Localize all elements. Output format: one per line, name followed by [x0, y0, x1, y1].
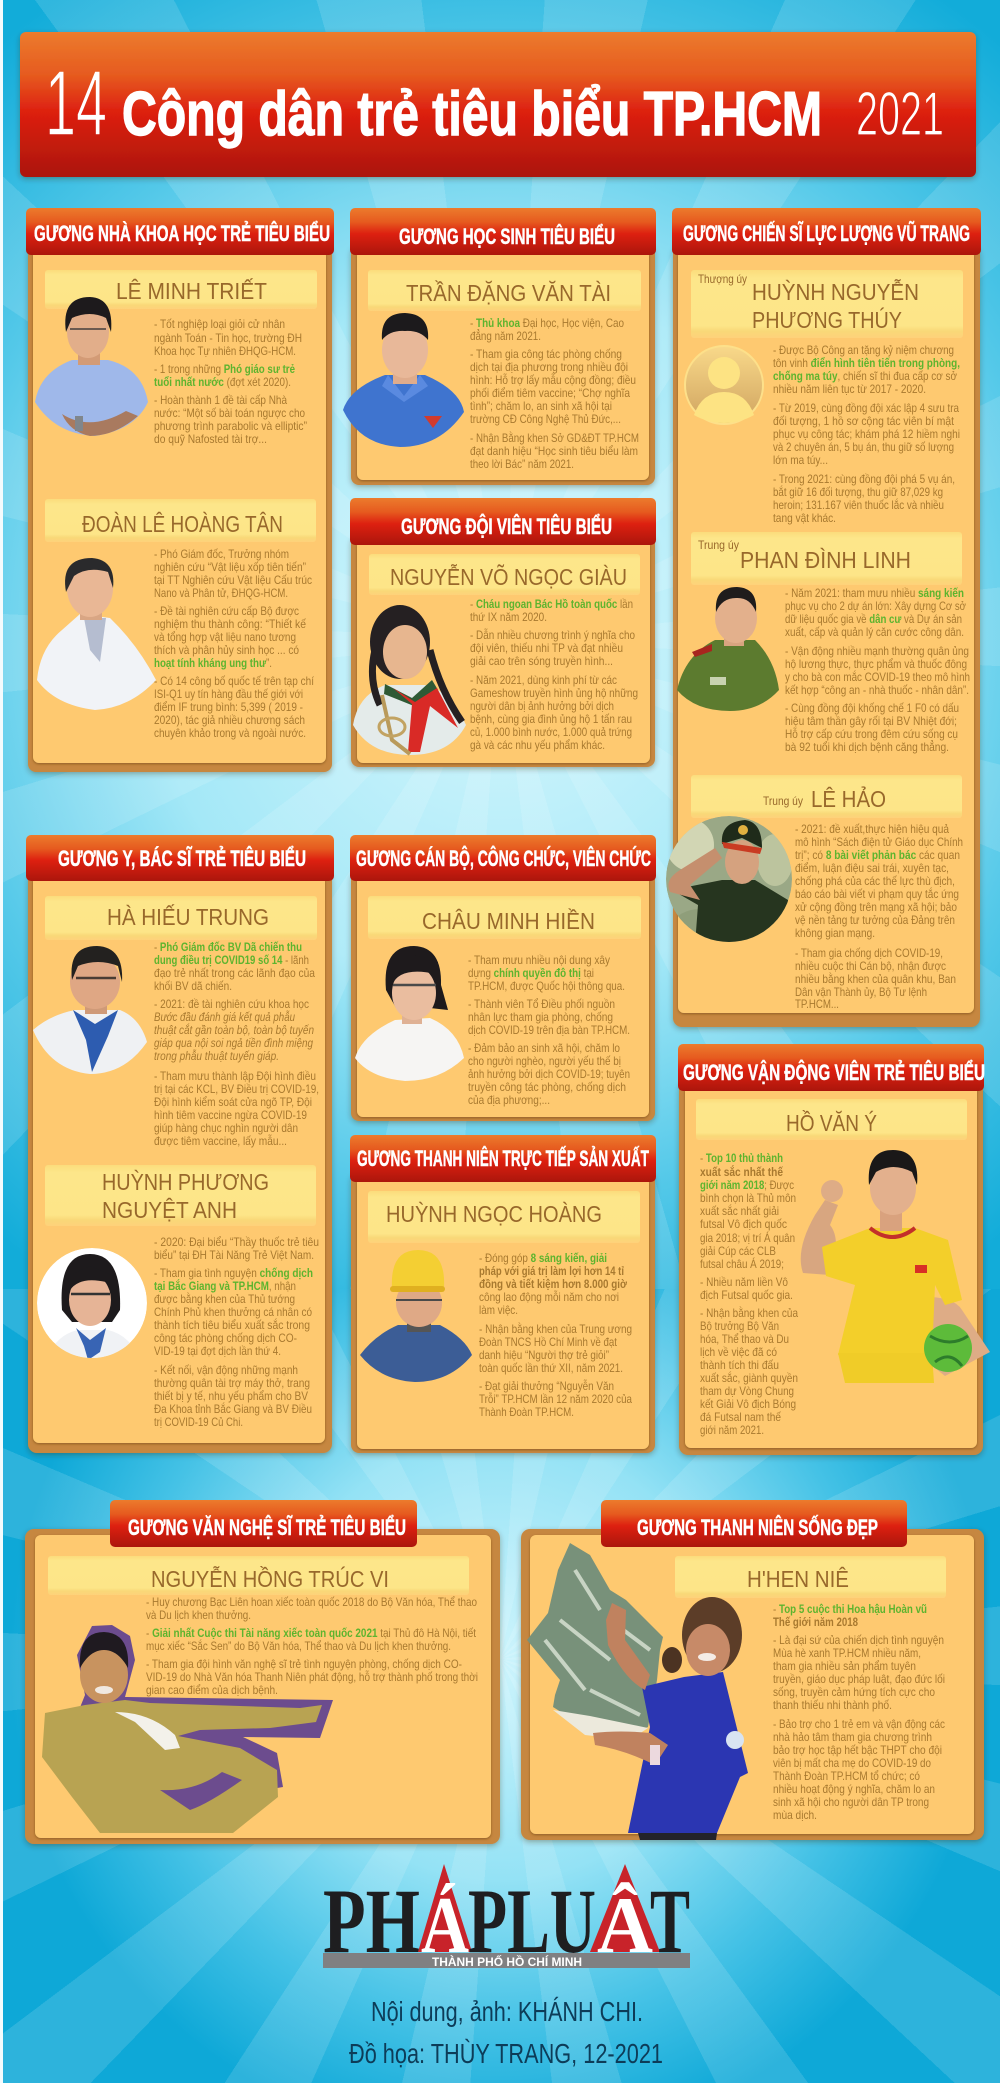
bio: Lê Hảo: nhiều cuộc thi Cán bộ, nhận được — [795, 959, 946, 973]
bio: Lê Hảo: vệ nền tảng tư tưởng của Đảng trên — [795, 913, 955, 927]
bio: Huỳnh Phương Nguyệt Anh: Chính Phủ khen thưởng cá nhân có — [154, 1305, 312, 1319]
portrait: Trần Đặng Văn Tài — [343, 313, 464, 447]
bio: Hồ Văn Ý: - Nhận bằng khen của — [700, 1305, 798, 1320]
bio: Nguyễn Võ Ngọc Giàu: bệnh, cùng gia đình ủng hộ 1 tấn rau — [470, 712, 632, 726]
bio: Phan Đình Linh: - Vận động nhiều mạnh thường quân ủng — [785, 644, 969, 658]
bio: Hồ Văn Ý: xuất sắc nhất thế — [700, 1164, 783, 1179]
bio: H'Hen Niê: Thành Đoàn TP.HCM tổ chức; có — [773, 1769, 920, 1783]
bio: Hồ Văn Ý: lịch về việc đã có — [700, 1345, 777, 1359]
bio: Nguyễn Hồng Trúc Vi: VID-19 do Nhà Văn hóa Thanh Niên phát động, hỗ trợ thành phố trong thời — [146, 1669, 478, 1684]
bio: Đoàn Lê Hoàng Tân — [154, 547, 315, 740]
bio: Châu Minh Hiền — [468, 953, 630, 1107]
name bar: Châu Minh Hiền — [368, 896, 641, 939]
bio: Hà Hiếu Trung: giúp hàng chục nghìn người dân — [154, 1121, 298, 1135]
bio: Lê Hảo: trị”; có 8 bài viết phản bác các quan — [795, 848, 960, 862]
bio: Đoàn Lê Hoàng Tân: - Đề tài nghiên cứu cấp Bộ được — [154, 604, 299, 618]
bio: Lê Hảo: Dân vận Thành ủy, Bộ Tư lệnh — [795, 985, 927, 999]
portrait: Hà Hiếu Trung — [33, 946, 147, 1074]
bio: Châu Minh Hiền: cho người nghèo, người yếu thế bị — [468, 1054, 621, 1068]
bio: Châu Minh Hiền: dịch COVID-19 trên địa bàn TP.HCM. — [468, 1023, 630, 1037]
panel: outstanding young pioneer — [350, 498, 656, 767]
bio: Hà Hiếu Trung: đạo trẻ nhất trong các lãnh đạo của — [154, 966, 315, 980]
panel: young scientists — [26, 208, 334, 772]
logo: Pháp Luật: T — [650, 1870, 690, 1972]
bio: Hồ Văn Ý: xuất sắc, giành quyền — [700, 1370, 798, 1385]
bio: Phan Đình Linh: bà 92 tuổi khi dịch bệnh căng thẳng. — [785, 739, 949, 754]
bio: Hồ Văn Ý: Bộ trưởng Bộ Văn — [700, 1319, 779, 1333]
portrait: H'Hen Niê with painting — [527, 1543, 748, 1840]
title year: 2021 — [856, 80, 944, 149]
bio: Lê Minh Triết: do quỹ Nafosted tài trợ... — [154, 432, 267, 446]
bio: Huỳnh Ngọc Hoàng: đồng và tiết kiệm hơn 8.000 giờ — [479, 1277, 627, 1291]
bio: Huỳnh Phương Nguyệt Anh: biểu” tại ĐH Tài Năng Trẻ Việt Nam. — [154, 1248, 314, 1262]
bio: H'Hen Niê: mùa dịch. — [773, 1808, 817, 1822]
name bar: H'Hen Niê: H'HEN NIÊ — [747, 1566, 849, 1592]
bio: Châu Minh Hiền: của địa phương;... — [468, 1093, 550, 1107]
bio: Lê Minh Triết: nước: “Một số bài toán ngược cho — [154, 406, 305, 420]
name bar: Huỳnh Nguyễn Phương Thúy: Thượng úy — [698, 272, 747, 286]
bio: Huỳnh Nguyễn Phương Thúy: - Được Bộ Công an tặng kỷ niệm chương — [773, 343, 954, 357]
title text: Công dân trẻ tiêu biểu TP.HCM — [122, 80, 822, 149]
bio: Hà Hiếu Trung: thuật cắt gần toàn bộ, toàn bộ tuyến — [154, 1022, 314, 1037]
bio: Huỳnh Ngọc Hoàng: công lao động mỗi năm cho nơi — [479, 1289, 619, 1304]
bio: Đoàn Lê Hoàng Tân: Nano và Phân tử, ĐHQG-HCM. — [154, 586, 288, 600]
bio: Châu Minh Hiền: ảnh hưởng bởi dịch COVID-19; tuyên — [468, 1067, 630, 1081]
bio: H'Hen Niê: - Top 5 cuộc thi Hoa hậu Hoàn vũ — [773, 1602, 927, 1616]
name bar: Lê Hảo: Trung úy — [763, 794, 803, 808]
bio: Lê Hảo: TP.HCM... — [795, 997, 839, 1011]
bio: Phan Đình Linh: hiệu tâm thần gây rối tại BV Nhiệt đới; — [785, 714, 957, 728]
bio: Nguyễn Hồng Trúc Vi: gian cao điểm của dịch bệnh. — [146, 1683, 278, 1697]
name bar: Huỳnh Nguyễn Phương Thúy: HUỲNH NGUYỄN — [752, 277, 919, 305]
name bar: Phan Đình Linh — [691, 532, 962, 585]
bio: Huỳnh Phương Nguyệt Anh: - Kết nối, vận động những mạnh — [154, 1363, 298, 1377]
bio: Trần Đặng Văn Tài: - Thủ khoa Đại học, Học viện, Cao — [470, 316, 624, 330]
bio: Trần Đặng Văn Tài — [470, 316, 639, 471]
bio: Hồ Văn Ý: kết Giải Vô địch Bóng — [700, 1397, 796, 1411]
name bar: Hà Hiếu Trung — [45, 896, 317, 940]
name bar: Đoàn Lê Hoàng Tân — [45, 499, 316, 542]
bio: Hồ Văn Ý: giới năm 2018; Được — [700, 1178, 794, 1192]
logo: Pháp Luật: PLU — [468, 1870, 596, 1972]
name bar: Lê Hảo — [691, 775, 962, 818]
bio: Huỳnh Nguyễn Phương Thúy: - Trong 2021: cùng đồng đội phá 5 vụ án, — [773, 472, 955, 486]
bio: Lê Minh Triết: - Tốt nghiệp loại giỏi cử nhân — [154, 317, 285, 331]
panel heading — [26, 835, 334, 881]
bio: Hồ Văn Ý: - Nhiều năm liền Vô — [700, 1275, 788, 1289]
bio: Phan Đình Linh: hộ lương thực, thực phẩm và thuốc đông — [785, 657, 967, 671]
bio: H'Hen Niê: Mùa hè xanh TP.HCM nhiều năm, — [773, 1646, 921, 1660]
bio: Huỳnh Nguyễn Phương Thúy: lớn ma túy... — [773, 453, 828, 467]
bio: Nguyễn Võ Ngọc Giàu: đội viên, thiếu nhi TP và đạt nhiều — [470, 641, 623, 655]
panel heading — [350, 498, 656, 545]
panel heading — [350, 208, 656, 255]
bio: Phan Đình Linh: - Năm 2021: tham mưu nhiều sáng kiến — [785, 586, 964, 600]
bio: Lê Minh Triết: - 1 trong những Phó giáo sư trẻ — [154, 362, 295, 376]
name bar: Đoàn Lê Hoàng Tân: ĐOÀN LÊ HOÀNG TÂN — [82, 511, 283, 537]
bio: Hà Hiếu Trung: dung điều trị COVID19 số 14 - lãnh — [154, 953, 309, 967]
bio: Hồ Văn Ý: futsal Vô địch quốc — [700, 1217, 787, 1231]
panel heading: GƯƠNG ĐỘI VIÊN TIÊU BIỂU — [401, 514, 612, 539]
portrait: Châu Minh Hiền — [355, 946, 464, 1081]
bio: Nguyễn Hồng Trúc Vi: - Huy chương Bạc Liên hoan xiếc toàn quốc 2018 do Bộ Văn hóa, Thể thao — [146, 1595, 477, 1609]
bio: Hồ Văn Ý: xuất sắc nhất giải — [700, 1203, 779, 1218]
name bar: Huỳnh Ngọc Hoàng — [368, 1191, 640, 1243]
portrait: Huỳnh Phương Nguyệt Anh — [37, 1248, 147, 1360]
bio: Huỳnh Ngọc Hoàng: Trỗi” TP.HCM lần 12 năm 2020 của — [479, 1391, 632, 1406]
bio: Nguyễn Hồng Trúc Vi: và Du lịch khen thưởng. — [146, 1608, 251, 1622]
bio: Hồ Văn Ý: bình chọn là Thủ môn — [700, 1191, 796, 1205]
bio: Đoàn Lê Hoàng Tân: hoạt tính kháng ung thư”. — [154, 656, 272, 670]
bio: Huỳnh Phương Nguyệt Anh: tại Bắc Giang và TP.HCM, nhận — [154, 1278, 296, 1293]
name bar: Hồ Văn Ý: HỒ VĂN Ý — [786, 1109, 877, 1136]
bio: Hồ Văn Ý: gia 2018; vị trí Á quân — [700, 1230, 795, 1245]
bio: H'Hen Niê: viên bị mất cha mẹ do COVID-19 do — [773, 1756, 931, 1770]
bio: Huỳnh Nguyễn Phương Thúy: heroin; 131.167 viên thuốc lắc và nhiều — [773, 497, 944, 512]
bio: Huỳnh Nguyễn Phương Thúy: tôn vinh điển hình tiên tiến trong phòng, — [773, 356, 960, 370]
name bar: Trần Đặng Văn Tài — [368, 270, 641, 311]
panel: armed forces — [666, 208, 981, 1027]
bio: Đoàn Lê Hoàng Tân: thích và phân hủy sinh học ... có — [154, 643, 299, 657]
panel heading: GƯƠNG VĂN NGHỆ SĨ TRẺ TIÊU BIỂU — [128, 1515, 406, 1540]
bio: Huỳnh Phương Nguyệt Anh: - Tham gia tình nguyện chống dịch — [154, 1266, 313, 1280]
bio: H'Hen Niê: truyền, giáo dục pháp luật, đạo đức lối — [773, 1672, 945, 1686]
name bar: Huỳnh Phương Nguyệt Anh: HUỲNH PHƯƠNG — [102, 1169, 269, 1195]
name bar: Lê Minh Triết: LÊ MINH TRIẾT — [116, 277, 267, 304]
panel heading — [350, 835, 656, 881]
bio: Đoàn Lê Hoàng Tân: - Phó Giám đốc, Trưởng nhóm — [154, 547, 289, 561]
panel heading: GƯƠNG CÁN BỘ, CÔNG CHỨC, VIÊN CHỨC — [356, 846, 651, 871]
bio: H'Hen Niê: nhà hảo tâm tham gia chương trình — [773, 1730, 932, 1744]
bio: Đoàn Lê Hoàng Tân: chuyên khảo trong và ngoài nước. — [154, 726, 306, 740]
name bar: Nguyễn Võ Ngọc Giàu: NGUYỄN VÕ NGỌC GIÀU — [390, 562, 627, 590]
title banner — [20, 32, 976, 177]
panel: beautiful living — [521, 1500, 984, 1840]
bio: Huỳnh Phương Nguyệt Anh: thường quân tài trợ máy thở, trang — [154, 1376, 310, 1390]
bio: Lê Minh Triết: Khoa học Tự nhiên ĐHQG-HCM. — [154, 344, 296, 358]
panel heading — [601, 1500, 907, 1547]
name bar: Huỳnh Phương Nguyệt Anh — [45, 1165, 316, 1226]
bio: Châu Minh Hiền: truyền công tác phòng, chống dịch — [468, 1080, 626, 1094]
bio: Huỳnh Nguyễn Phương Thúy: đối tượng, 1 hồ sơ cộng tác viên bí mật — [773, 414, 955, 428]
bio: Hồ Văn Ý: giải Cúp các CLB — [700, 1244, 776, 1258]
bio: Lê Hảo — [795, 822, 963, 1011]
bio: Hồ Văn Ý: futsal châu Á 2019; — [700, 1256, 784, 1271]
bio: Hà Hiếu Trung: trị tại các KCL, BV Điều trị COVID-19, — [154, 1082, 319, 1096]
bio: Lê Hảo: - Tham gia chống dịch COVID-19, — [795, 946, 943, 960]
icon: placeholder avatar — [685, 346, 763, 424]
bio: Hồ Văn Ý — [700, 1151, 798, 1437]
bio: Huỳnh Phương Nguyệt Anh: công tác phòng chống dịch CO- — [154, 1331, 297, 1345]
name bar: Trần Đặng Văn Tài: TRẦN ĐẶNG VĂN TÀI — [406, 279, 611, 306]
bio: Huỳnh Phương Nguyệt Anh: thành tích tiêu biểu xuất sắc trong — [154, 1317, 310, 1332]
logo: Pháp Luật: PH — [323, 1870, 420, 1972]
bio: Huỳnh Nguyễn Phương Thúy: bắt giữ 16 đối tượng, thu giữ 87,029 kg — [773, 484, 943, 499]
portrait: Huỳnh Ngọc Hoàng — [360, 1250, 472, 1382]
bio: Hồ Văn Ý: đá Futsal nam thế — [700, 1410, 781, 1424]
logo: Pháp Luật — [323, 1864, 690, 1972]
portrait: Lê Hảo — [666, 816, 793, 945]
bio: Trần Đặng Văn Tài: - Tham gia công tác phòng chống — [470, 347, 622, 361]
bio: Hồ Văn Ý: - Top 10 thủ thành — [700, 1151, 783, 1165]
panel heading: GƯƠNG HỌC SINH TIÊU BIỂU — [399, 224, 615, 249]
portrait: Nguyễn Võ Ngọc Giàu — [353, 605, 466, 755]
bio: Hà Hiếu Trung: hình tiêm vaccine ngừa COVID-19 — [154, 1108, 307, 1122]
bio: Trần Đặng Văn Tài: dịch tại địa phương trong nhiều đội — [470, 360, 628, 374]
bio: Lê Minh Triết: tuổi nhất nước (đợt xét 2020). — [154, 375, 291, 389]
bio: Lê Minh Triết: phương trình parabolic và elliptic” — [154, 419, 307, 433]
bio: Phan Đình Linh: xuất, cấp và quản lý căn cước công dân. — [785, 625, 964, 639]
bio: Nguyễn Võ Ngọc Giàu: Gameshow truyền hình ủng hộ những — [470, 686, 638, 700]
bio: Châu Minh Hiền: nhân lực tham gia phòng, chống — [468, 1010, 613, 1024]
bio: Đoàn Lê Hoàng Tân: nghiệm thu thành công: “Thiết kế — [154, 617, 306, 631]
name bar: Huỳnh Nguyễn Phương Thúy: PHƯƠNG THÚY — [752, 307, 902, 333]
bio: Phan Đình Linh: Hỗ trợ cấp cứu trong đêm cứu sống cụ — [785, 726, 958, 741]
bio: Lê Hảo: báo cáo bài viết vi phạm quy tắc ứng — [795, 886, 959, 901]
bio: Lê Hảo: xử cộng đồng trên mạng xã hội; bảo — [795, 900, 957, 914]
bio: Đoàn Lê Hoàng Tân: - Có 14 công bố quốc tế trên tạp chí — [154, 674, 315, 688]
logo: Pháp Luật: Á — [421, 1882, 469, 1970]
name bar: Phan Đình Linh: Trung úy — [698, 538, 739, 552]
name bar: H'Hen Niê — [675, 1556, 946, 1598]
bio: Trần Đặng Văn Tài: tình”; chăm lo, an sinh xã hội tại — [470, 399, 612, 413]
portrait: Hồ Văn Ý — [801, 1150, 990, 1383]
bio: Phan Đình Linh: - Cùng đồng đội khống chế 1 F0 có dấu — [785, 701, 959, 715]
bio: Trần Đặng Văn Tài: đạt danh hiệu “Học sinh tiêu biểu làm — [470, 444, 638, 458]
bio: H'Hen Niê: - Là đại sứ của chiến dịch tình nguyện — [773, 1633, 944, 1647]
bio: Huỳnh Phương Nguyệt Anh: Đa Khoa tỉnh Bắc Giang và BV Điều — [154, 1401, 312, 1416]
bio: Hà Hiếu Trung: Đội hình kiểm soát cửa ngõ TP, Đội — [154, 1095, 312, 1109]
name bar: Nguyễn Hồng Trúc Vi — [48, 1556, 469, 1595]
bio: Huỳnh Ngọc Hoàng: danh hiệu “Người thợ trẻ giỏi” — [479, 1348, 609, 1362]
bio: Trần Đặng Văn Tài: theo lời Bác” năm 2021. — [470, 457, 574, 471]
credits: Nội dung, ảnh: KHÁNH CHI. — [371, 1996, 643, 2027]
bio: Huỳnh Ngọc Hoàng: toàn quốc lần thứ XII, năm 2021. — [479, 1361, 623, 1375]
panel heading — [110, 1500, 417, 1547]
bio: Huỳnh Nguyễn Phương Thúy: và 2 chuyên án, 5 bụ án, thu giữ số lượng — [773, 440, 954, 454]
icon: red triangle first A — [418, 1864, 472, 1952]
bio: Lê Hảo: điểm, luận điệu sai trái, xuyên tạc, — [795, 861, 949, 875]
bio: Nguyễn Hồng Trúc Vi — [146, 1595, 478, 1697]
bio: Lê Hảo: nhiều bằng khen của quân khu, Ban — [795, 971, 956, 986]
name bar: Nguyễn Võ Ngọc Giàu — [369, 554, 640, 595]
bio: Nguyễn Võ Ngọc Giàu: giải cao trên sóng truyền hình... — [470, 654, 613, 668]
bio: H'Hen Niê: bảo trợ học tập hết bậc THPT cho đội — [773, 1743, 942, 1757]
panel heading: GƯƠNG NHÀ KHOA HỌC TRẺ TIÊU BIỂU — [34, 221, 330, 246]
panel heading — [26, 208, 334, 255]
bio: Hà Hiếu Trung: giáp qua nội soi ngả tiền đình miệng — [154, 1036, 313, 1050]
bio: Hồ Văn Ý: thành tích thi đấu — [700, 1358, 779, 1372]
bio: Nguyễn Võ Ngọc Giàu: - Cháu ngoan Bác Hồ toàn quốc lần — [470, 597, 633, 611]
bio: Nguyễn Võ Ngọc Giàu — [470, 597, 638, 752]
bio: Trần Đặng Văn Tài: đẳng năm 2021. — [470, 328, 541, 343]
panel: young athlete — [678, 1044, 990, 1455]
credits: Đồ họa: THÙY TRANG, 12-2021 — [349, 2038, 663, 2069]
bio: Châu Minh Hiền: - Tham mưu nhiều nội dung xây — [468, 953, 610, 967]
bio: Châu Minh Hiền: - Đảm bảo an sinh xã hội, chăm lo — [468, 1041, 620, 1055]
bio: Huỳnh Ngọc Hoàng — [479, 1251, 632, 1419]
bio: Phan Đình Linh — [785, 586, 970, 754]
bio: Huỳnh Phương Nguyệt Anh: trị COVID-19 Củ Chi. — [154, 1415, 243, 1429]
bio: Trần Đặng Văn Tài: trường CĐ Công Nghệ Thủ Đức,... — [470, 412, 621, 426]
bio: Đoàn Lê Hoàng Tân: ISI-Q1 uy tín hàng đầu thế giới với — [154, 687, 303, 701]
panel heading: GƯƠNG THANH NIÊN TRỰC TIẾP SẢN XUẤT — [357, 1146, 649, 1171]
bio: Hồ Văn Ý: giới năm 2021. — [700, 1423, 764, 1437]
title number 14: 14 — [45, 51, 107, 155]
bio: Huỳnh Ngọc Hoàng: - Đóng góp 8 sáng kiến, giải — [479, 1251, 607, 1265]
bio: Lê Hảo: không gian mạng. — [795, 926, 875, 940]
logo: Pháp Luật: THÀNH PHỐ HỒ CHÍ MINH — [432, 1954, 582, 1969]
bio: H'Hen Niê: sinh xã hội cho người dân TP trong — [773, 1795, 929, 1809]
name bar: Lê Hảo: LÊ HẢO — [811, 784, 886, 812]
bio: Phan Đình Linh: dữ liệu quốc gia về dân cư và Dự án sản — [785, 612, 962, 626]
bio: Lê Hảo: mô hình “Sách điện tử Giáo dục Chính — [795, 835, 963, 849]
bio: Huỳnh Nguyễn Phương Thúy: nhiều năm liên tục từ 2017 - 2020. — [773, 382, 926, 396]
bio: Hà Hiếu Trung: Bước đầu đánh giá kết quả phẫu — [154, 1010, 295, 1024]
icon: red triangle second A — [590, 1864, 660, 1952]
bio: Đoàn Lê Hoàng Tân: tại TT Nghiên cứu Vật liệu Cấu trúc — [154, 573, 312, 587]
panel: civil servants — [350, 835, 656, 1121]
panel: young artists — [25, 1500, 500, 1844]
bio: Hồ Văn Ý: địch Futsal quốc gia. — [700, 1288, 793, 1302]
name bar: Hà Hiếu Trung: HÀ HIẾU TRUNG — [107, 903, 269, 930]
panel heading — [350, 1135, 656, 1182]
bio: Huỳnh Phương Nguyệt Anh: được bằng khen của Thủ tướng — [154, 1291, 295, 1306]
panel: outstanding student — [343, 208, 656, 485]
portrait: Lê Minh Triết — [35, 297, 148, 436]
credits — [349, 1996, 663, 2069]
bio: Hà Hiếu Trung: - 2021: đề tài nghiên cứu khoa học — [154, 997, 309, 1011]
bio: Huỳnh Ngọc Hoàng: pháp với giá trị làm lợi hơn 14 tỉ — [479, 1264, 625, 1278]
bio: H'Hen Niê: sống, truyền cảm hứng tích cực cho — [773, 1685, 935, 1699]
bio: H'Hen Niê: Thế giới năm 2018 — [773, 1615, 858, 1629]
panel: young doctors — [26, 835, 334, 1453]
bio: Huỳnh Nguyễn Phương Thúy: tang vật khác. — [773, 511, 836, 525]
portrait: Phan Đình Linh — [677, 587, 779, 711]
bio: Đoàn Lê Hoàng Tân: nghiên cứu “Vật liệu xốp tiên tiến” — [154, 560, 306, 574]
bio: Lê Minh Triết: - Hoàn thành 1 đề tài cấp Nhà — [154, 393, 287, 407]
name bar: Nguyễn Hồng Trúc Vi: NGUYỄN HỒNG TRÚC VI — [151, 1564, 389, 1592]
bio: Nguyễn Võ Ngọc Giàu: người dân bị ảnh hưởng bởi dịch — [470, 699, 614, 713]
bio: Trần Đặng Văn Tài: - Nhận Bằng khen Sở GD&ĐT TP.HCM — [470, 430, 639, 445]
bio: H'Hen Niê — [773, 1602, 945, 1822]
bio: Đoàn Lê Hoàng Tân: 2020), tác giả nhiều chương sách — [154, 713, 305, 727]
bio: Huỳnh Nguyễn Phương Thúy — [773, 343, 960, 525]
bio: Hà Hiếu Trung: khối BV dã chiến. — [154, 979, 232, 993]
bio: Huỳnh Nguyễn Phương Thúy: chống ma túy, chiến sĩ thi đua cấp cơ sở — [773, 369, 957, 383]
bio: Đoàn Lê Hoàng Tân: điểm IF trung bình: 5,399 ( 2019 - — [154, 700, 303, 714]
bio: Huỳnh Phương Nguyệt Anh: - 2020: Đại biểu “Thầy thuốc trẻ tiêu — [154, 1235, 319, 1249]
bio: Hồ Văn Ý: tham dự Vòng Chung — [700, 1384, 794, 1398]
bio: Châu Minh Hiền: - Thành viên Tổ Điều phối nguồn — [468, 997, 615, 1011]
bio: Huỳnh Ngọc Hoàng: Thành Đoàn TP.HCM. — [479, 1405, 574, 1419]
bio: Trần Đặng Văn Tài: hình: Hỗ trợ lấy mẫu cộng đồng; điều — [470, 372, 636, 387]
bio: Nguyễn Hồng Trúc Vi: - Tham gia đội hình văn nghệ sĩ trẻ tình nguyện phòng, chống dịch CO- — [146, 1657, 462, 1671]
panel heading: GƯƠNG Y, BÁC SĨ TRẺ TIÊU BIỂU — [58, 846, 306, 871]
bio: Nguyễn Hồng Trúc Vi: - Giải nhất Cuộc thi Tài năng xiếc toàn quốc 2021 tại Thủ đô Hà Nội, tiết — [146, 1626, 477, 1640]
bio: Nguyễn Võ Ngọc Giàu: gà và các nhu yếu phẩm khác. — [470, 738, 605, 752]
bio: Hà Hiếu Trung: được tiêm vaccine, lấy mẫu... — [154, 1133, 287, 1148]
bio: Nguyễn Võ Ngọc Giàu: củ, 1.000 bình nước, 1.000 quả trứng — [470, 725, 632, 739]
bio: Huỳnh Phương Nguyệt Anh — [154, 1235, 319, 1429]
bio: Trần Đặng Văn Tài: phối điểm tiêm vaccine; “Chợ nghĩa — [470, 386, 630, 400]
name bar: Huỳnh Nguyễn Phương Thúy — [691, 270, 963, 338]
bio: H'Hen Niê: - Bảo trợ cho 1 trẻ em và vận động các — [773, 1717, 945, 1731]
bio: Huỳnh Ngọc Hoàng: Đoàn TNCS Hồ Chí Minh về đạt — [479, 1335, 618, 1349]
portrait: Nguyễn Hồng Trúc Vi — [42, 1625, 333, 1833]
bio: H'Hen Niê: tham gia nhiều sản phẩm tuyên — [773, 1659, 916, 1673]
bio: Huỳnh Nguyễn Phương Thúy: - Từ 2019, cùng đồng đội xác lập 4 sưu tra — [773, 401, 959, 415]
panel heading — [672, 208, 981, 255]
portrait: Đoàn Lê Hoàng Tân — [37, 558, 156, 710]
bio: Đoàn Lê Hoàng Tân: và tổng hợp vật liệu nano tương — [154, 630, 296, 644]
bio: H'Hen Niê: thanh thiếu nhi thành phố. — [773, 1698, 892, 1712]
bio: Nguyễn Võ Ngọc Giàu: - Dẫn nhiều chương trình ý nghĩa cho — [470, 627, 635, 642]
bio: Nguyễn Võ Ngọc Giàu: - Năm 2021, dùng kinh phí từ các — [470, 673, 617, 687]
bio: Lê Minh Triết — [154, 317, 307, 446]
bio: Châu Minh Hiền: dựng chính quyền đô thị tại — [468, 966, 594, 980]
name bar: Châu Minh Hiền: CHÂU MINH HIỀN — [422, 907, 595, 934]
name bar: Huỳnh Phương Nguyệt Anh: NGUYỆT ANH — [102, 1197, 237, 1223]
name bar: Hồ Văn Ý — [696, 1099, 967, 1140]
bio: Hà Hiếu Trung: trong phẫu thuật tuyến giáp. — [154, 1049, 279, 1063]
bio: Hà Hiếu Trung: - Phó Giám đốc BV Dã chiến thu — [154, 940, 302, 954]
bio: Huỳnh Nguyễn Phương Thúy: phục vụ công tác; khám phá 12 hiềm nghi — [773, 427, 960, 441]
bio: Huỳnh Phương Nguyệt Anh: VID-19 tại đợt dịch lần thứ 4. — [154, 1344, 281, 1358]
logo: Pháp Luật: Ậ — [597, 1882, 653, 1970]
bio: Hà Hiếu Trung — [154, 940, 319, 1148]
bio: Lê Minh Triết: ngành Toán - Tin học, trường ĐH — [154, 331, 302, 345]
bio: Lê Hảo: chống phá của các thế lực thù địch, — [795, 874, 955, 888]
bio: Lê Hảo: - 2021: đề xuất,thực hiện hiệu quả — [795, 822, 949, 836]
bio: Nguyễn Võ Ngọc Giàu: thứ IX năm 2020. — [470, 610, 547, 624]
panel heading: GƯƠNG THANH NIÊN SỐNG ĐẸP — [637, 1514, 878, 1540]
bio: H'Hen Niê: nhiều hoạt động ý nghĩa, chăm lo an — [773, 1782, 935, 1796]
panel: young production workers — [350, 1135, 656, 1453]
bio: Nguyễn Hồng Trúc Vi: mục xiếc “Sắc Sen” do Bộ Văn hóa, Thể thao và Du lịch khen thưởng. — [146, 1638, 451, 1653]
bio: Châu Minh Hiền: TP.HCM, được Quốc hội thông qua. — [468, 979, 625, 993]
name bar: Huỳnh Ngọc Hoàng: HUỲNH NGỌC HOÀNG — [386, 1201, 602, 1227]
name bar: Phan Đình Linh: PHAN ĐÌNH LINH — [740, 547, 911, 573]
bio: Huỳnh Phương Nguyệt Anh: thiết bị y tế, nhu yếu phẩm cho BV — [154, 1389, 308, 1403]
bio: Hà Hiếu Trung: - Tham mưu thành lập Đội hình điều — [154, 1069, 316, 1083]
bio: Huỳnh Ngọc Hoàng: - Nhận bằng khen của Trung ương — [479, 1321, 632, 1336]
bio: Huỳnh Ngọc Hoàng: - Đạt giải thưởng “Nguyễn Văn — [479, 1378, 614, 1393]
name bar: Lê Minh Triết — [45, 270, 317, 309]
bio: Hồ Văn Ý: hóa, Thể thao và Du — [700, 1332, 789, 1346]
panel heading — [678, 1044, 985, 1091]
bio: Huỳnh Ngọc Hoàng: làm việc. — [479, 1303, 518, 1317]
